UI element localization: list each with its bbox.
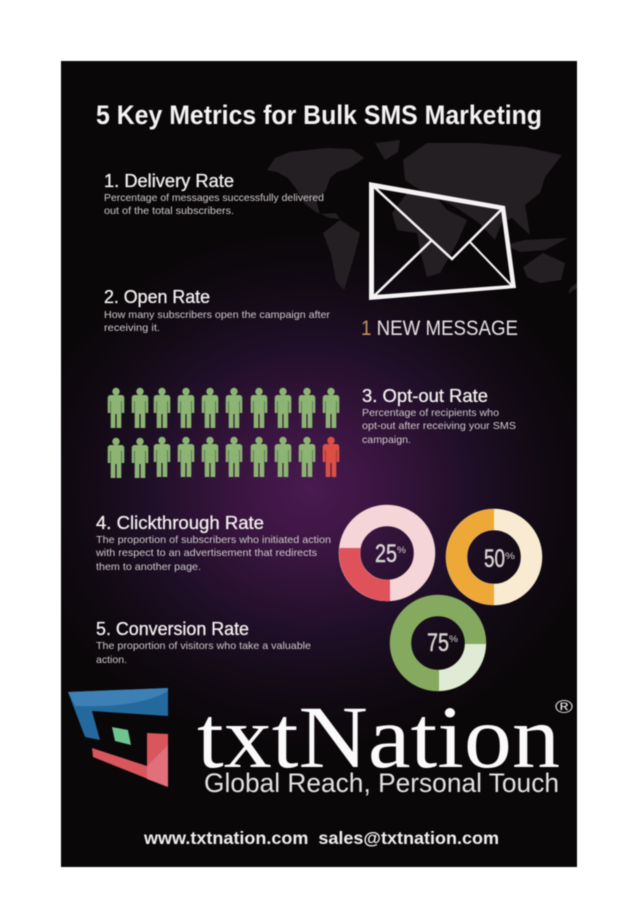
metric 1: delivery rate: Percentage of messages successfully delivered — [104, 192, 324, 204]
brand name: txtNation — [197, 689, 560, 787]
donut chart: 75% — [400, 606, 486, 691]
donut chart: 50%: 50 — [484, 545, 505, 573]
panel: dark background — [61, 61, 577, 867]
donut chart: 75%: 75 — [427, 629, 449, 657]
metric 4: clickthrough rate: 4. Clickthrough Rate — [96, 513, 264, 533]
donut chart: 50% — [446, 509, 532, 605]
contact details: www.txtnation.com sales@txtnation.com — [143, 828, 499, 848]
donut chart: 50%: % — [505, 551, 515, 561]
metric 3: opt-out rate: opt-out after receiving your SMS — [362, 420, 516, 432]
donut chart: 25%: 25 — [375, 540, 397, 568]
tagline: Global Reach, Personal Touch — [204, 768, 559, 798]
logo: txtNation mark — [68, 688, 168, 787]
metric 5: conversion rate — [96, 619, 311, 666]
metric 3: opt-out rate: 3. Opt-out Rate — [362, 386, 488, 406]
title: 5 Key Metrics for Bulk SMS Marketing — [96, 100, 542, 130]
metric 4: clickthrough rate: them to another page. — [96, 561, 201, 573]
metric 3: opt-out rate — [362, 386, 516, 446]
metric 2: open rate: receiving it. — [104, 322, 160, 334]
icon: envelope — [369, 182, 516, 300]
registered mark: ® — [555, 697, 573, 717]
metric 4: clickthrough rate: The proportion of subscribers who initiated action — [96, 534, 331, 546]
donut chart: 75%: % — [449, 634, 458, 644]
metric 1: delivery rate: 1. Delivery Rate — [104, 171, 234, 191]
metric 1: delivery rate — [104, 171, 324, 217]
donut chart: 25% — [339, 516, 424, 601]
metric 1: delivery rate: out of the total subscribers. — [104, 205, 234, 217]
metric 4: clickthrough rate: with respect to an advertisement that redirects — [95, 547, 317, 559]
metric 5: conversion rate: 5. Conversion Rate — [96, 619, 249, 639]
metric 2: open rate: How many subscribers open the campaign after — [104, 309, 330, 321]
metric 4: clickthrough rate — [95, 513, 331, 573]
metric 2: open rate: 2. Open Rate — [104, 287, 210, 307]
new message caption: 1 NEW MESSAGE — [361, 317, 518, 340]
metric 3: opt-out rate: Percentage of recipients who — [362, 407, 499, 419]
metric 5: conversion rate: action. — [96, 654, 127, 666]
pictogram: 20 people, one in red — [108, 388, 339, 478]
world map — [267, 140, 577, 294]
donut chart: 25%: % — [397, 545, 406, 555]
metric 3: opt-out rate: campaign. — [362, 434, 411, 446]
metric 2: open rate — [104, 287, 330, 334]
metric 5: conversion rate: The proportion of visitors who take a valuable — [96, 640, 311, 652]
